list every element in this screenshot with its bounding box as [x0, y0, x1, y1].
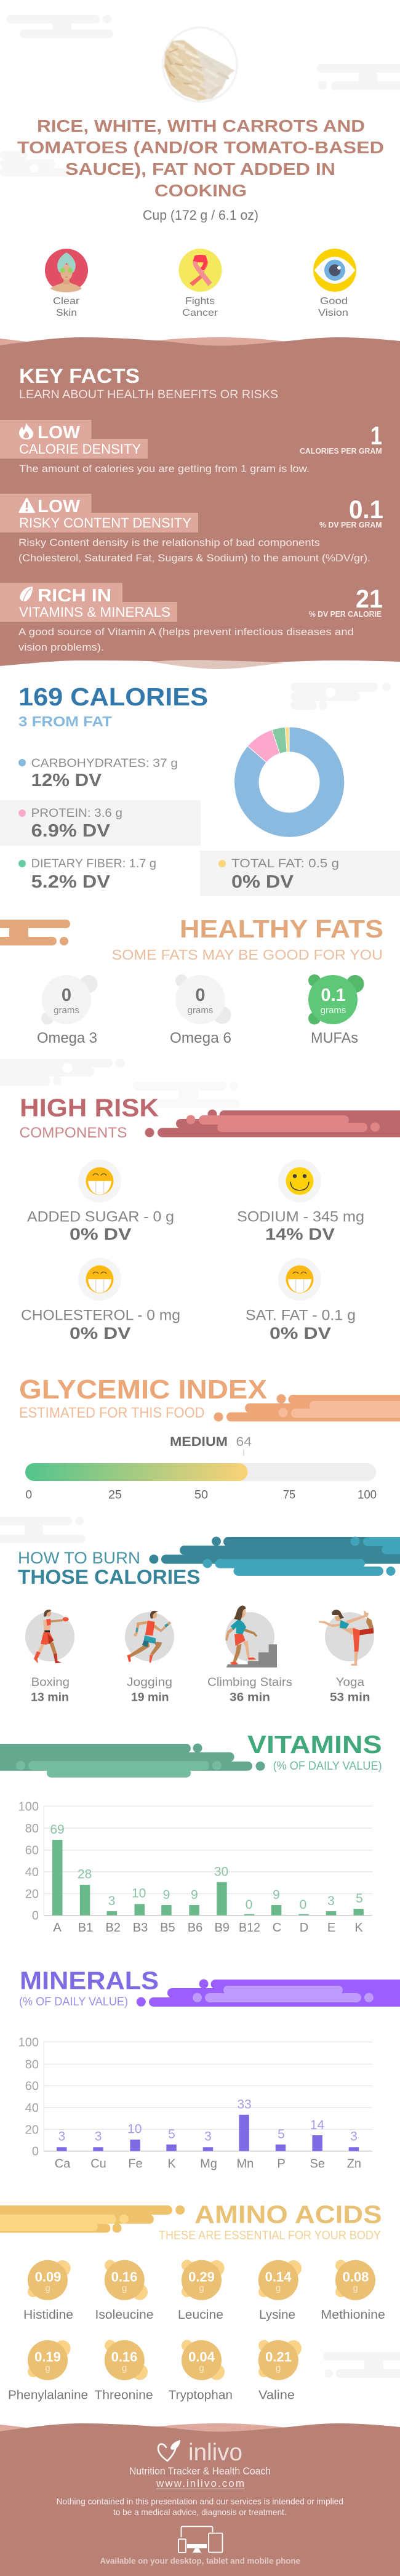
- amino acid: leucine: 0.29: [188, 2269, 215, 2285]
- fact: rich in vitamins and minerals: VITAMINS & MINERALS: [19, 604, 170, 620]
- background cloud: high risk center: [133, 1082, 240, 1108]
- amino acid: valine: [258, 2340, 302, 2402]
- bar chart: minerals: Cu: [90, 2157, 106, 2171]
- heading: key facts: KEY FACTS: [19, 364, 140, 387]
- bar chart: vitamins: B6: [188, 1921, 202, 1935]
- risk item: cholesterol: 0% DV: [70, 1324, 130, 1342]
- logo: inlivo heart and wordmark: inlivo: [188, 2439, 242, 2466]
- bar chart: minerals: Zn: [347, 2157, 361, 2171]
- heading: healthy fats: HEALTHY FATS: [180, 915, 383, 943]
- risk item: added sugar: [27, 1160, 174, 1243]
- fat: omega 3: [37, 975, 97, 1046]
- bar chart: minerals: 3: [58, 2130, 65, 2144]
- footer tagline and website: www.inlivo.com: [156, 2478, 244, 2489]
- legend: carbohydrates: CARBOHYDRATES: 37 g: [31, 757, 178, 770]
- heading: high risk: COMPONENTS: [20, 1125, 127, 1141]
- bar chart: vitamins: C: [273, 1921, 281, 1935]
- bar chart: vitamins: 9: [191, 1888, 198, 1902]
- benefit: fights cancer: Cancer: [182, 308, 218, 318]
- heading decoration: high risk: [145, 1109, 400, 1138]
- fact: risky content density: (Cholesterol, Saturated Fat, Sugars & Sodium) to the amount (%DV/gr).: [18, 553, 370, 564]
- bar chart: minerals: Se: [310, 2157, 325, 2171]
- amino acid: tryptophan: g: [199, 2363, 204, 2373]
- amino acid: isoleucine: g: [122, 2283, 127, 2293]
- background cloud: calories: [290, 683, 391, 710]
- bar chart: vitamins: B5: [160, 1921, 175, 1935]
- background cloud: burn calories: [0, 1517, 86, 1543]
- amino acid: isoleucine: 0.16: [111, 2269, 137, 2285]
- bar chart: minerals: 5: [168, 2127, 175, 2141]
- exercise: jogging: Jogging: [127, 1676, 172, 1689]
- bar chart: vitamins: 30: [214, 1865, 228, 1879]
- bar chart: vitamins: D: [300, 1921, 308, 1935]
- heading: glycemic index: [19, 1374, 267, 1421]
- fact: calorie density: The amount of calories you are getting from 1 gram is low.: [19, 463, 310, 475]
- heading: healthy fats: SOME FATS MAY BE GOOD FOR YOU: [112, 947, 383, 963]
- bar chart: minerals: 20: [25, 2123, 39, 2137]
- amino acid: phenylalanine: Phenylalanine: [8, 2388, 88, 2402]
- exercise: yoga: [319, 1610, 374, 1704]
- bar chart: vitamins: B12: [239, 1921, 260, 1935]
- glycemic index gauge: 25: [108, 1489, 122, 1502]
- amino acid: tryptophan: Tryptophan: [169, 2388, 233, 2402]
- bar chart: vitamins: K: [354, 1921, 363, 1935]
- bar chart: vitamins: 9: [273, 1888, 280, 1902]
- amino acid: histidine: 0.09: [35, 2269, 61, 2285]
- donut chart: [234, 727, 345, 837]
- fat: omega 6: 0: [195, 985, 206, 1005]
- fact: calorie density: 1: [370, 421, 382, 450]
- heading: amino acids: THESE ARE ESSENTIAL FOR YOUR BODY: [159, 2229, 381, 2242]
- fact: risky content density: % DV PER GRAM: [319, 520, 382, 529]
- benefit: clear skin: [45, 249, 88, 318]
- footer panel: [0, 2423, 400, 2576]
- heading: key facts: LEARN ABOUT HEALTH BENEFITS OR RISKS: [19, 388, 278, 401]
- fact: risky content density: Risky Content density is the relationship of bad components: [18, 537, 320, 548]
- benefit: fights cancer: Fights: [185, 296, 215, 307]
- legend: dietary fiber: [18, 857, 156, 892]
- exercise: boxing: [25, 1610, 74, 1704]
- risk item: sodium: 14% DV: [265, 1225, 335, 1243]
- fat: omega 3: grams: [54, 1005, 79, 1016]
- bar chart: minerals: Fe: [128, 2157, 143, 2171]
- heading: amino acids: [159, 2201, 382, 2242]
- risk item: cholesterol: CHOLESTEROL - 0 mg: [21, 1307, 180, 1324]
- amino acid: histidine: Histidine: [23, 2308, 73, 2322]
- heading: vitamins: VITAMINS: [247, 1730, 382, 1759]
- panel: key facts: [0, 337, 400, 669]
- bar chart: minerals: 60: [25, 2079, 39, 2093]
- legend: carbohydrates: [18, 757, 178, 790]
- benefit: clear skin: Clear: [53, 296, 80, 307]
- amino acid: isoleucine: [95, 2260, 154, 2322]
- fact: rich in vitamins and minerals: % DV PER CALORIE: [309, 609, 382, 619]
- glycemic index gauge: 75: [283, 1489, 295, 1502]
- heading: 169 calories: [18, 683, 208, 729]
- fat: omega 6: grams: [188, 1005, 213, 1016]
- legend: protein: PROTEIN: 3.6 g: [31, 807, 122, 820]
- bar chart: minerals: 80: [25, 2058, 39, 2071]
- amino acid: lysine: Lysine: [259, 2308, 295, 2322]
- bar chart: vitamins: 60: [25, 1844, 39, 1858]
- bar chart: minerals: Mn: [237, 2157, 254, 2171]
- bar chart: vitamins: 0: [32, 1909, 39, 1923]
- exercise: climbing stairs: [207, 1605, 292, 1704]
- background cloud: amino acids: [322, 2352, 400, 2378]
- food photo: rice in ring: [163, 28, 237, 102]
- disclaimer: Nothing contained in this presentation and our services is intended or implied: [57, 2496, 343, 2506]
- title: SAUCE), FAT NOT ADDED IN: [65, 159, 335, 179]
- bar chart: minerals: K: [167, 2157, 176, 2171]
- heading decoration: vitamins: [0, 1743, 265, 1778]
- fact: rich in vitamins and minerals: vision problems).: [18, 642, 104, 653]
- risk item: added sugar: 0% DV: [70, 1225, 132, 1243]
- legend: total fat: 0% DV: [231, 872, 294, 892]
- amino acid: methionine: 0.08: [343, 2269, 369, 2285]
- exercise: jogging: [125, 1611, 174, 1704]
- bar chart: minerals: 33: [237, 2098, 252, 2112]
- heading: glycemic index: GLYCEMIC INDEX: [19, 1374, 267, 1405]
- legend: total fat: TOTAL FAT: 0.5 g: [231, 857, 339, 870]
- heading: vitamins: [247, 1730, 382, 1773]
- fat: mufas: grams: [321, 1005, 346, 1016]
- fat: mufas: MUFAs: [311, 1030, 358, 1046]
- bar chart: vitamins: 28: [78, 1868, 92, 1882]
- exercise: yoga: Yoga: [336, 1676, 364, 1689]
- glycemic index gauge: MEDIUM: [170, 1435, 228, 1449]
- amino acid: threonine: Threonine: [94, 2388, 153, 2402]
- exercise: climbing stairs: Climbing Stairs: [207, 1676, 292, 1689]
- glycemic index gauge: 64: [236, 1435, 252, 1449]
- logo: inlivo heart and wordmark: [158, 2439, 242, 2466]
- amino acid: valine: Valine: [258, 2388, 295, 2402]
- amino acid: leucine: [178, 2260, 225, 2322]
- exercise: climbing stairs: 36 min: [230, 1691, 270, 1704]
- amino acid: histidine: [23, 2260, 73, 2322]
- glycemic index gauge: 0: [26, 1489, 32, 1502]
- heading: minerals: (% OF DAILY VALUE): [19, 1995, 128, 2008]
- amino acid: valine: g: [276, 2363, 281, 2373]
- amino acid: isoleucine: Isoleucine: [95, 2308, 154, 2322]
- heading decoration: amino acids: [0, 2205, 185, 2233]
- glycemic index gauge: [25, 1435, 377, 1502]
- title: RICE, WHITE, WITH CARROTS AND: [37, 116, 365, 135]
- bar chart: minerals: 40: [25, 2101, 39, 2115]
- fat: mufas: [308, 974, 364, 1046]
- heading: healthy fats: [112, 915, 383, 963]
- amino acid: methionine: [321, 2260, 385, 2322]
- fact: rich in vitamins and minerals: A good source of Vitamin A (helps prevent infectious diseases and: [18, 627, 354, 638]
- fact: risky content density: LOW: [38, 497, 81, 516]
- heading: 169 calories: 3 FROM FAT: [18, 713, 112, 729]
- amino acid: lysine: [258, 2260, 302, 2322]
- bar chart: vitamins: 80: [25, 1822, 39, 1836]
- legend: protein: 6.9% DV: [31, 821, 111, 841]
- bar chart: minerals: P: [277, 2157, 286, 2171]
- amino acid: threonine: [94, 2340, 153, 2402]
- title: TOMATOES (AND/OR TOMATO-BASED: [17, 138, 384, 157]
- fact: calorie density: [0, 420, 382, 475]
- legend: carbohydrates: 12% DV: [31, 771, 102, 790]
- bar chart: minerals: 10: [127, 2122, 142, 2137]
- bar chart: vitamins: 40: [25, 1866, 39, 1879]
- bar chart: vitamins: B3: [133, 1921, 148, 1935]
- serving size: Cup (172 g / 6.1 oz): [143, 207, 258, 223]
- disclaimer: [57, 2496, 343, 2517]
- amino acid: histidine: g: [45, 2283, 50, 2293]
- fact: risky content density: RISKY CONTENT DENSITY: [19, 515, 191, 531]
- risk item: saturated fat: [246, 1258, 356, 1342]
- bar chart: vitamins: A: [53, 1921, 62, 1935]
- bar chart: minerals: 14: [310, 2118, 324, 2132]
- risk item: sodium: SODIUM - 345 mg: [237, 1209, 364, 1226]
- exercise: jogging: 19 min: [131, 1691, 169, 1704]
- heading: glycemic index: ESTIMATED FOR THIS FOOD: [19, 1405, 204, 1421]
- icon: devices: [178, 2526, 223, 2553]
- disclaimer: to be a medical advice, diagnosis or treatment.: [113, 2507, 287, 2517]
- bar chart: minerals: 100: [18, 2036, 39, 2049]
- heading decoration: minerals: [137, 1980, 400, 2007]
- fact: risky content density: [0, 494, 383, 564]
- benefit: good vision: Vision: [318, 308, 348, 318]
- heading: 169 calories: 169 CALORIES: [18, 683, 208, 711]
- benefit: good vision: Good: [320, 296, 348, 307]
- background cloud: top right: [317, 64, 400, 90]
- fact: calorie density: LOW: [38, 423, 81, 443]
- amino acid: lysine: g: [276, 2283, 281, 2293]
- bar chart: vitamins: E: [327, 1921, 335, 1935]
- risk item: cholesterol: [21, 1258, 180, 1342]
- glycemic index gauge: 100: [358, 1489, 377, 1502]
- bar chart: vitamins: 0: [300, 1898, 306, 1912]
- bar chart: minerals: 5: [278, 2127, 285, 2141]
- legend: total fat: [200, 851, 400, 896]
- bar chart: vitamins: 3: [108, 1894, 115, 1908]
- amino acid: phenylalanine: g: [45, 2363, 50, 2373]
- bar chart: vitamins: 100: [18, 1800, 39, 1813]
- fact: rich in vitamins and minerals: RICH IN: [38, 586, 111, 606]
- bar chart: minerals: 3: [350, 2130, 358, 2144]
- glycemic index gauge: 50: [194, 1489, 208, 1502]
- exercise: boxing: 13 min: [31, 1691, 69, 1704]
- heading: how to burn those calories: [18, 1549, 201, 1588]
- amino acid: lysine: 0.14: [265, 2269, 292, 2285]
- bar chart: minerals: 3: [204, 2130, 212, 2144]
- availability note: Available on your desktop, tablet and mobile phone: [100, 2556, 300, 2566]
- heading: high risk: [20, 1093, 159, 1141]
- bar chart: vitamins: 3: [327, 1894, 335, 1908]
- amino acid: tryptophan: [169, 2340, 233, 2402]
- heading: high risk: HIGH RISK: [20, 1093, 159, 1121]
- fat: omega 3: Omega 3: [37, 1030, 97, 1046]
- heading: minerals: [19, 1967, 159, 2008]
- title: COOKING: [154, 181, 247, 200]
- fat: mufas: 0.1: [321, 985, 346, 1005]
- bar chart: vitamins: 0: [246, 1898, 252, 1912]
- amino acid: phenylalanine: [8, 2340, 88, 2402]
- bar chart: vitamins: 69: [50, 1823, 65, 1837]
- fact: calorie density: CALORIE DENSITY: [19, 441, 141, 457]
- bar chart: vitamins: 20: [25, 1887, 39, 1901]
- amino acid: leucine: Leucine: [178, 2308, 223, 2322]
- fact: rich in vitamins and minerals: 21: [356, 584, 383, 613]
- footer tagline and website: Nutrition Tracker & Health Coach: [129, 2465, 271, 2477]
- fact: risky content density: 0.1: [349, 495, 383, 524]
- bar chart: minerals: 3: [95, 2130, 102, 2144]
- legend: dietary fiber: DIETARY FIBER: 1.7 g: [31, 857, 156, 870]
- legend: protein: [0, 800, 201, 846]
- risk item: saturated fat: 0% DV: [270, 1324, 331, 1342]
- heading: minerals: MINERALS: [20, 1967, 159, 1995]
- amino acid: tryptophan: 0.04: [188, 2349, 215, 2365]
- bar chart: vitamins: B9: [214, 1921, 230, 1935]
- bar chart: minerals: 0: [32, 2145, 39, 2159]
- amino acid: valine: 0.21: [265, 2349, 292, 2365]
- legend: dietary fiber: 5.2% DV: [31, 872, 111, 892]
- bar chart: vitamins: 10: [132, 1887, 146, 1901]
- fact: rich in vitamins and minerals: [0, 583, 383, 653]
- fat: omega 6: Omega 6: [170, 1030, 231, 1046]
- amino acid: threonine: 0.16: [111, 2349, 137, 2365]
- bar chart: minerals: Mg: [200, 2157, 217, 2171]
- fat: omega 3: 0: [62, 985, 71, 1005]
- heading: vitamins: (% OF DAILY VALUE): [273, 1759, 382, 1773]
- heading decoration: glycemic index: [214, 1394, 400, 1422]
- bar chart: vitamins: 5: [356, 1892, 363, 1906]
- benefit: good vision: [313, 249, 356, 318]
- bar chart: minerals: Ca: [55, 2157, 71, 2171]
- fact: calorie density: CALORIES PER GRAM: [300, 446, 382, 455]
- risk item: added sugar: ADDED SUGAR - 0 g: [27, 1209, 174, 1226]
- footer tagline and website: [129, 2465, 271, 2489]
- bar chart: vitamins: B1: [78, 1921, 93, 1935]
- benefit: fights cancer: [178, 249, 222, 318]
- amino acid: leucine: g: [199, 2283, 204, 2293]
- risk item: saturated fat: SAT. FAT - 0.1 g: [246, 1307, 356, 1324]
- bar chart: vitamins: B2: [105, 1921, 121, 1935]
- exercise: yoga: 53 min: [330, 1691, 370, 1704]
- bar chart: vitamins: [18, 1800, 372, 1935]
- heading: how to burn those calories: HOW TO BURN: [18, 1549, 140, 1567]
- amino acid: threonine: g: [122, 2363, 127, 2373]
- heading: amino acids: AMINO ACIDS: [194, 2201, 382, 2229]
- benefit: clear skin: Skin: [56, 308, 77, 318]
- heading: how to burn those calories: THOSE CALORIES: [18, 1566, 201, 1588]
- exercise: boxing: Boxing: [31, 1676, 70, 1689]
- bar chart: minerals: [18, 2036, 372, 2171]
- heading decoration: healthy fats: [0, 920, 70, 945]
- amino acid: phenylalanine: 0.19: [34, 2349, 61, 2365]
- background cloud: top left: [6, 15, 113, 38]
- background cloud: high risk left: [0, 1059, 124, 1086]
- risk item: sodium: [237, 1160, 364, 1243]
- heading: key facts: [19, 364, 278, 401]
- background cloud: behind title: [0, 151, 71, 177]
- fat: omega 6: [170, 974, 231, 1046]
- heading decoration: burn calories: [149, 1536, 400, 1576]
- amino acid: methionine: Methionine: [321, 2308, 385, 2322]
- bar chart: vitamins: 9: [163, 1888, 170, 1902]
- amino acid: methionine: g: [353, 2283, 358, 2293]
- title: [17, 116, 384, 200]
